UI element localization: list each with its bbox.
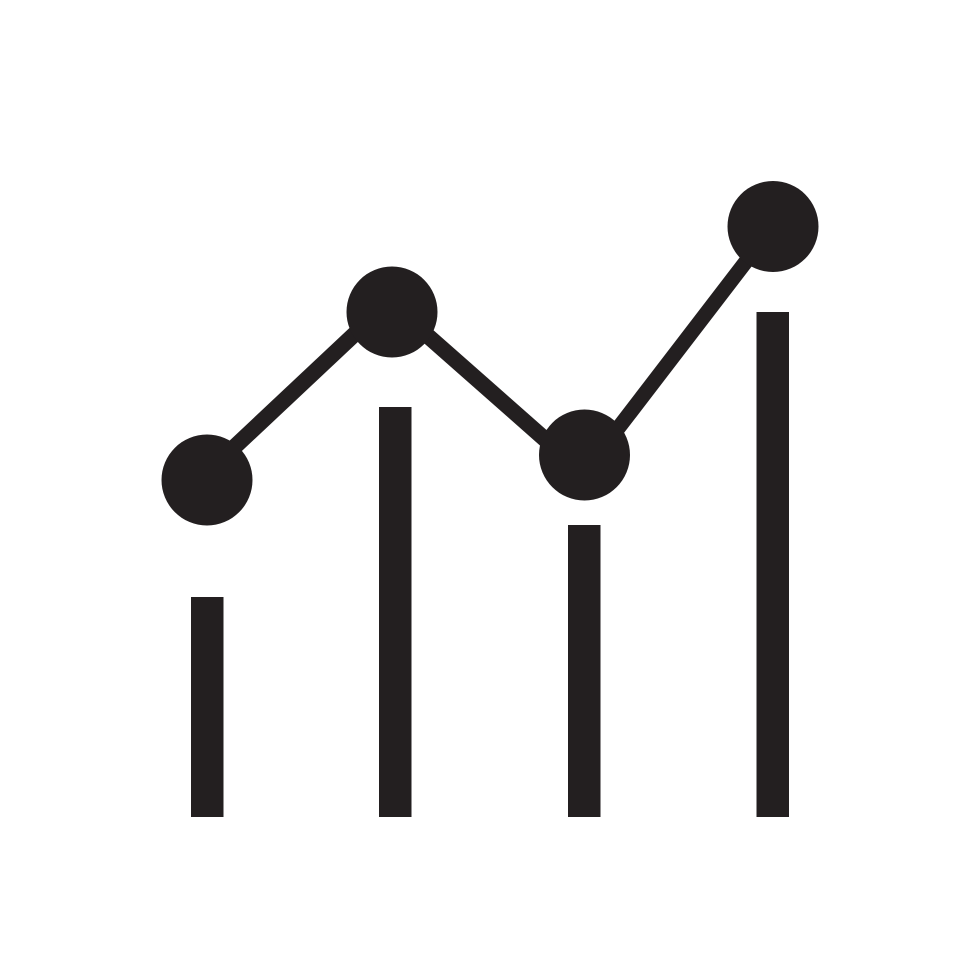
bars: [191, 312, 789, 817]
trend line with markers: [162, 181, 818, 526]
